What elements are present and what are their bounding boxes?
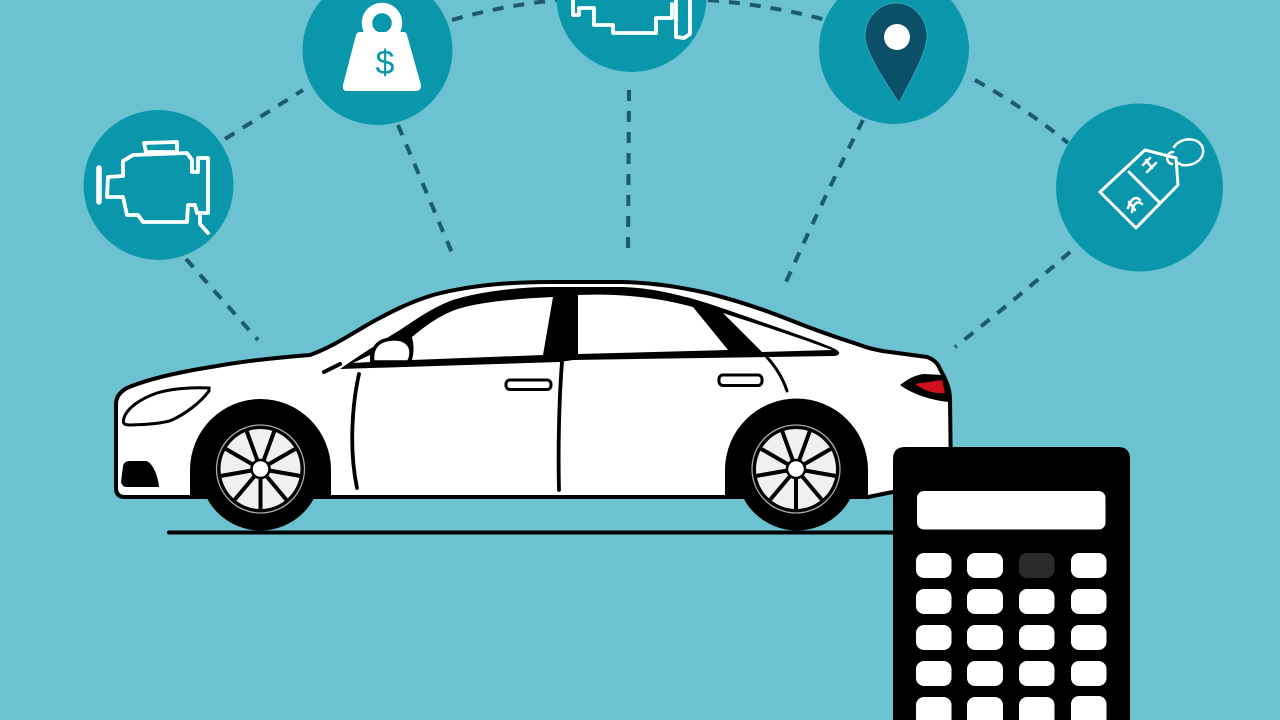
- car body: [116, 282, 951, 497]
- icon: price tag badge: [1056, 104, 1223, 272]
- headlight: [123, 388, 209, 425]
- calculator keypad: [916, 553, 1106, 720]
- icon: location pin badge: [819, 0, 969, 124]
- calculator: [893, 447, 1130, 720]
- small front quarter glass: [353, 355, 370, 363]
- door handles: [506, 380, 551, 390]
- ground line: [167, 530, 897, 534]
- rear quarter window: [723, 313, 832, 352]
- rear window: [578, 295, 728, 354]
- wing mirror: [373, 339, 411, 362]
- icon: engine badge: [84, 110, 234, 260]
- icon: money weight badge: [302, 0, 452, 125]
- icon: engine badge, top centre: [556, 0, 706, 72]
- icon: money weight badge: $: [376, 44, 395, 82]
- tail light: [900, 374, 949, 402]
- front window: [412, 297, 553, 360]
- front grille: [121, 461, 159, 487]
- window frame: [340, 287, 839, 369]
- dashed connector lines: [186, 0, 1070, 347]
- door lines: [324, 356, 787, 490]
- front wheel: [190, 399, 331, 530]
- calculator body: [893, 447, 1130, 720]
- rear wheel: [725, 398, 868, 530]
- calculator display: [917, 491, 1106, 530]
- car: [116, 282, 951, 530]
